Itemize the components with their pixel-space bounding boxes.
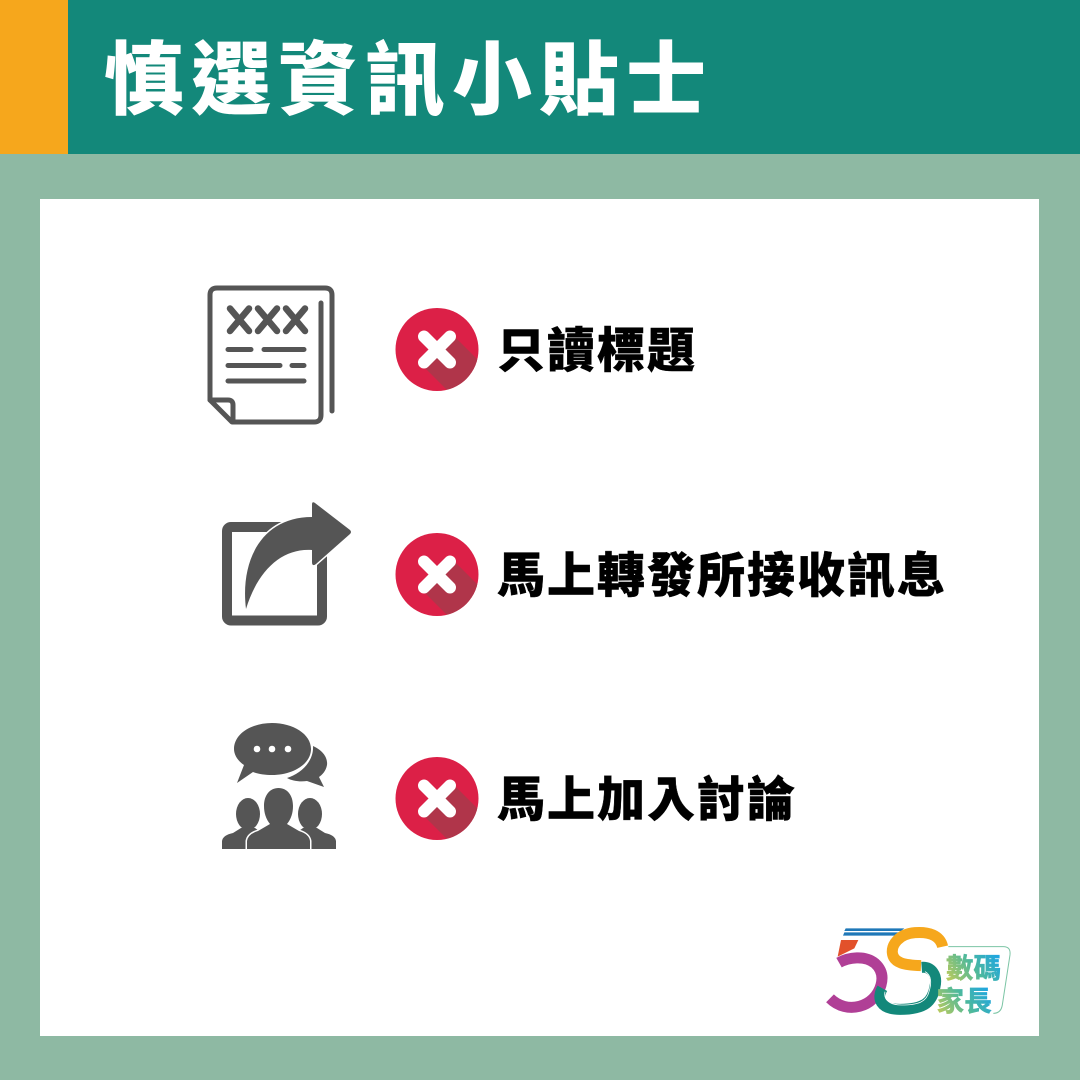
logo: 55 digital parents: 數碼 — [946, 952, 1001, 983]
label: forward immediately: 馬上轉發所接收訊息 — [497, 550, 947, 603]
icon: news article — [210, 288, 332, 422]
title: 慎選資訊小貼士 — [104, 36, 713, 125]
logo: 55 digital parents: 家長 — [937, 986, 992, 1017]
orange accent block — [0, 0, 68, 154]
icon: red cross 1 — [396, 308, 478, 391]
icon: share arrow — [227, 502, 351, 620]
icon: red cross 3 — [396, 757, 478, 840]
label: join discussion: 馬上加入討論 — [497, 774, 797, 827]
label: only read headlines: 只讀標題 — [497, 325, 697, 378]
icon: group chat — [222, 723, 336, 849]
header band — [0, 0, 1080, 154]
icon: red cross 2 — [396, 533, 478, 616]
panel: white content card — [40, 199, 1039, 1036]
logo: 55 digital parents — [830, 928, 1010, 1017]
